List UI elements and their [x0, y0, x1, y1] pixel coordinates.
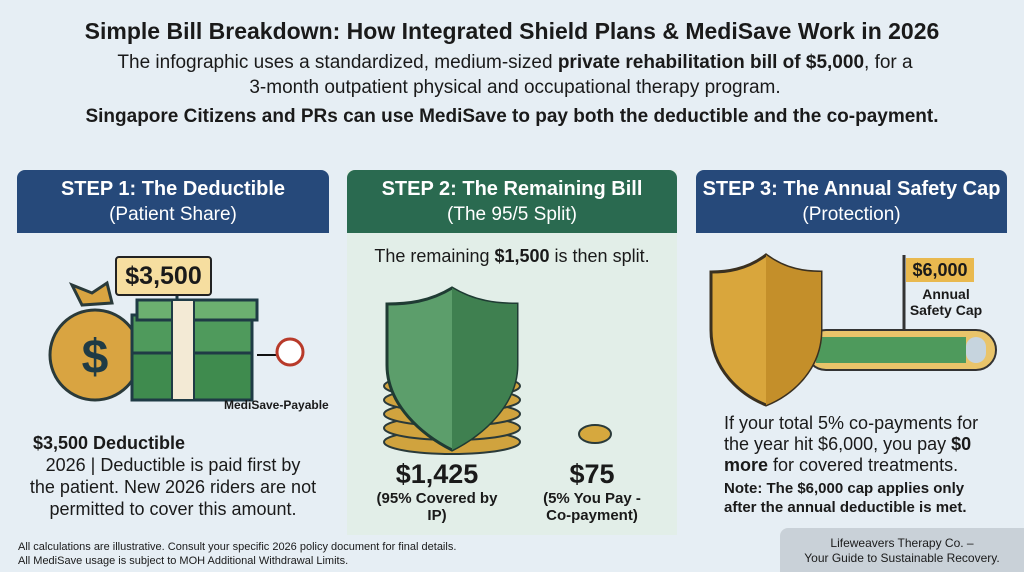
branding box: Your Guide to Sustainable Recovery. — [804, 551, 1000, 565]
step 3 header: (Protection) — [802, 204, 901, 225]
step 2 header — [347, 170, 677, 233]
text: cap explanation: more for covered treatments. — [724, 455, 958, 475]
step 1 header — [17, 170, 329, 233]
panel: step 3 — [696, 170, 1007, 516]
text: deductible explanation: $3,500 Deductible — [33, 433, 185, 453]
panel: step 1 — [17, 170, 329, 519]
text: deductible explanation: permitted to cover this amount. — [49, 499, 297, 519]
figure: $75: Co-payment) — [546, 507, 638, 524]
text: deductible explanation — [30, 433, 316, 519]
label: annual safety cap: Annual Safety Cap — [910, 286, 982, 318]
branding box: Lifeweavers Therapy Co. – — [830, 536, 974, 550]
step 3 header: STEP 3: The Annual Safety Cap — [703, 178, 1000, 200]
intro text: The infographic uses a standardized, medium-sized private rehabilitation bill of $5,000, for a — [117, 52, 913, 73]
text: cap explanation: Note: The $6,000 cap applies only — [724, 480, 964, 497]
branding box — [780, 528, 1024, 572]
intro text: 3-month outpatient physical and occupational therapy program. — [249, 77, 781, 98]
icon: shield with progress bar — [710, 253, 997, 407]
panel: step 2 — [347, 170, 677, 535]
flag: $6,000 — [906, 258, 974, 282]
text: cap explanation: If your total 5% co-payments for — [724, 413, 978, 433]
figure: $75: (5% You Pay - — [543, 490, 641, 507]
label: MediSave-Payable: MediSave-Payable — [224, 398, 329, 412]
icon: money bag and cash stack: $ — [82, 331, 109, 384]
figure: $1,425 — [377, 459, 498, 524]
step 2 header: (The 95/5 Split) — [447, 204, 577, 225]
step 1 header: STEP 1: The Deductible — [61, 178, 285, 200]
figure: $75: $75 — [569, 459, 615, 489]
callout: $3,500 — [115, 256, 212, 296]
flag: $6,000: $6,000 — [912, 260, 968, 280]
text: deductible explanation: the patient. New 2026 riders are not — [30, 477, 316, 497]
text: cap explanation: after the annual deductible is met. — [724, 499, 967, 516]
figure: $75 — [543, 459, 641, 524]
step 1 header: (Patient Share) — [109, 204, 237, 225]
intro text — [117, 52, 913, 98]
step 3 header — [696, 170, 1007, 233]
title: Simple Bill Breakdown: How Integrated Shield Plans & MediSave Work in 2026 — [85, 18, 939, 44]
footnote — [18, 541, 456, 567]
footnote: All calculations are illustrative. Consult your specific 2026 policy document for final details. — [18, 541, 456, 553]
icon: coin — [578, 424, 612, 444]
icon: shield with coins — [383, 286, 521, 455]
key message: Singapore Citizens and PRs can use MediSave to pay both the deductible and the co-payment. — [85, 106, 939, 127]
text: cap explanation — [724, 413, 978, 516]
step 2 header: STEP 2: The Remaining Bill — [382, 178, 642, 200]
text: deductible explanation: 2026 | Deductible is paid first by — [46, 455, 300, 475]
text: cap explanation: the year hit $6,000, you pay $0 — [724, 434, 971, 454]
figure: $1,425: (95% Covered by IP) — [377, 490, 497, 524]
icon: money bag and cash stack — [48, 280, 304, 402]
figure: $1,425: $1,425 — [396, 459, 478, 489]
footnote: All MediSave usage is subject to MOH Additional Withdrawal Limits. — [18, 555, 348, 567]
text: remaining split: The remaining $1,500 is then split. — [374, 246, 650, 266]
callout: $3,500: $3,500 — [125, 262, 202, 290]
